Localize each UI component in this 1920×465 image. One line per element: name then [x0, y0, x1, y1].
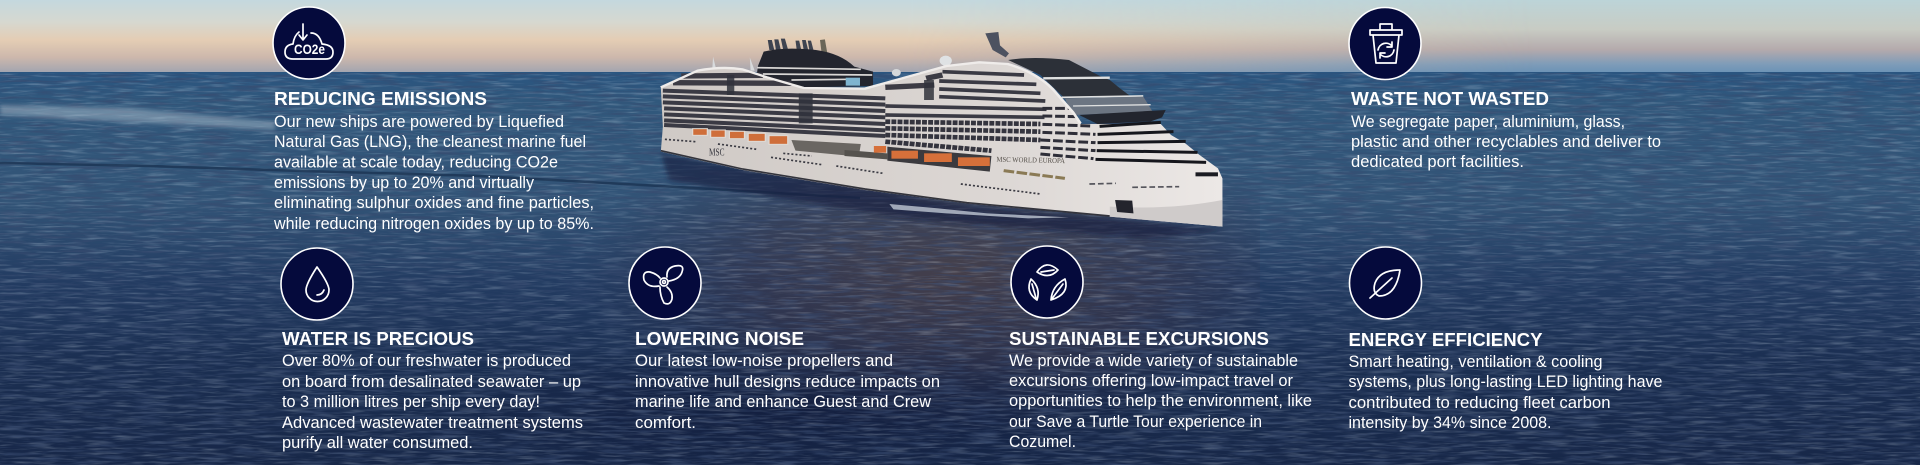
body text: We provide a wide variety of sustainable — [1009, 352, 1298, 370]
heading: SUSTAINABLE EXCURSIONS — [1009, 328, 1269, 349]
hull portholes — [665, 139, 1040, 194]
body text: We segregate paper, aluminium, glass, — [1351, 113, 1625, 131]
upper deck white bands — [757, 68, 872, 80]
body text: while reducing nitrogen oxides by up to 85%. — [273, 215, 594, 233]
body text: purify all water consumed. — [282, 434, 473, 452]
icon: propeller — [629, 247, 701, 319]
panel: sustainable excursions — [1009, 246, 1312, 451]
body text: marine life and enhance Guest and Crew — [635, 393, 931, 411]
body text: Cozumel. — [1009, 433, 1076, 451]
forward lifeboats — [874, 146, 991, 172]
body text: plastic and other recyclables and deliver to — [1351, 133, 1661, 151]
body text — [282, 352, 583, 452]
body text: Natural Gas (LNG), the cleanest marine fuel — [274, 133, 586, 151]
body text — [1348, 353, 1662, 432]
body text: comfort. — [635, 414, 696, 432]
icon: water drop — [281, 248, 353, 320]
body text — [273, 113, 594, 233]
body text: available at scale today, reducing CO2e — [274, 154, 558, 172]
icon: recycling bin — [1349, 8, 1421, 80]
body text: Over 80% of our freshwater is produced — [282, 352, 571, 370]
body text: Our new ships are powered by Liquefied — [274, 113, 564, 131]
body text: opportunities to help the environment, like — [1009, 392, 1312, 410]
body text: excursions offering low-impact travel or — [1009, 372, 1293, 390]
aft cabin balconies — [663, 91, 885, 136]
body text — [1351, 113, 1661, 171]
forward glass decks — [1008, 58, 1153, 115]
body text: innovative hull designs reduce impacts on — [635, 373, 940, 391]
body text: Advanced wastewater treatment systems — [282, 414, 583, 432]
hull and superstructure — [661, 62, 1222, 227]
upper aft windows — [673, 75, 942, 87]
panel: water is precious — [281, 248, 583, 452]
icon: leaf — [1350, 247, 1422, 319]
mid cabin bands — [885, 72, 1047, 117]
body text: to 3 million litres per ship every day! — [282, 393, 540, 411]
ship name: MSC WORLD EUROPA — [996, 155, 1065, 165]
heading: REDUCING EMISSIONS — [274, 88, 487, 109]
body text: emissions by up to 20% and virtually — [274, 174, 535, 192]
promenade band — [791, 140, 861, 157]
body text: contributed to reducing fleet carbon — [1348, 394, 1610, 412]
body text: on board from desalinated seawater – up — [282, 373, 581, 391]
body text: systems, plus long-lasting LED lighting have — [1348, 373, 1662, 391]
mid window grid — [885, 122, 1040, 151]
body text: eliminating sulphur oxides and fine particles, — [274, 194, 594, 212]
forward windows — [1040, 108, 1096, 159]
icon: three leaves — [1011, 246, 1083, 318]
aft lifeboats — [693, 129, 788, 144]
bow deck bands — [1096, 122, 1206, 162]
heading: LOWERING NOISE — [635, 328, 804, 349]
ship shadow on water — [661, 153, 1222, 238]
panel: reducing emissions — [273, 7, 594, 233]
ship logo: MSC — [709, 147, 724, 158]
bridge wing — [1079, 110, 1166, 124]
body text: our Save a Turtle Tour experience in — [1009, 413, 1262, 431]
white arches — [661, 62, 1080, 123]
anchor recess and bow slot — [1115, 200, 1133, 213]
panel: lowering noise — [629, 247, 940, 432]
funnels and mast — [712, 32, 1009, 76]
bow wake — [889, 204, 1069, 218]
cruise ship — [661, 32, 1222, 238]
icon: CO2e cloud — [273, 7, 345, 79]
body text — [1009, 352, 1312, 451]
heading: ENERGY EFFICIENCY — [1348, 329, 1543, 350]
body text: intensity by 34% since 2008. — [1348, 414, 1552, 432]
body text — [635, 352, 940, 432]
body text: dedicated port facilities. — [1351, 153, 1524, 171]
icon: CO2e cloud: CO2e — [294, 42, 325, 57]
body text: Smart heating, ventilation & cooling — [1348, 353, 1602, 371]
top deck dome — [757, 49, 873, 87]
panel: waste not wasted — [1349, 8, 1661, 171]
shadow columns — [727, 75, 934, 123]
body text: Our latest low-noise propellers and — [635, 352, 893, 370]
heading: WASTE NOT WASTED — [1351, 88, 1549, 109]
panel: energy efficiency — [1348, 247, 1662, 432]
waterline — [661, 151, 1110, 216]
heading: WATER IS PRECIOUS — [282, 328, 474, 349]
